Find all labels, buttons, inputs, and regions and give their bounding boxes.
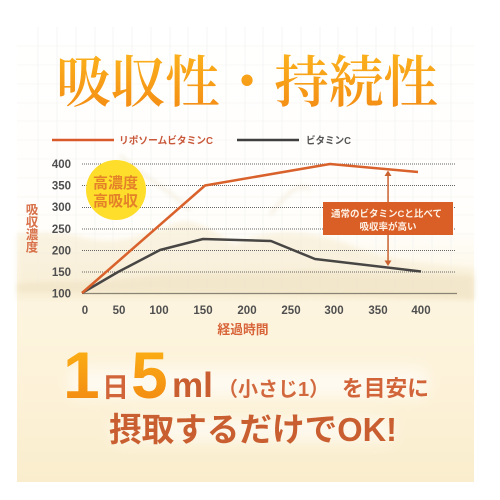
y axis title: 収	[26, 216, 39, 230]
legend	[52, 134, 351, 147]
x axis labels: 300	[324, 305, 344, 317]
line 1: を目安に	[342, 376, 429, 401]
x axis	[82, 292, 457, 294]
line 1: 5	[131, 338, 168, 412]
callout badge: high concentration: 高吸収	[93, 193, 138, 210]
arrow	[384, 170, 392, 266]
callout: higher absorption: 通常のビタミンCと比べて	[331, 208, 442, 220]
line 1: 日	[102, 373, 129, 403]
dosage message	[63, 338, 429, 448]
y axis title	[26, 203, 39, 254]
legend: liposome vitamin C: リポソームビタミンC	[119, 134, 213, 147]
y axis labels: 300	[52, 202, 71, 214]
callout badge: high concentration: 高濃度	[93, 174, 138, 192]
line chart	[26, 159, 457, 337]
x axis labels: 150	[193, 305, 213, 317]
grid lines	[82, 164, 456, 272]
line 2: 摂取するだけでOK!	[109, 411, 397, 448]
y axis labels: 200	[52, 246, 71, 258]
line 1: （小さじ1）	[218, 378, 329, 401]
series: liposome vitamin C	[82, 164, 418, 293]
x axis labels: 250	[281, 305, 301, 317]
callout badge: high concentration	[86, 160, 146, 220]
y axis labels: 250	[52, 224, 71, 236]
legend: vitamin C: ビタミンC	[306, 134, 351, 147]
x axis labels: 0	[82, 305, 88, 317]
x axis title: 経過時間	[217, 322, 269, 337]
series: vitamin C	[82, 239, 421, 293]
text glow	[70, 368, 428, 442]
y axis labels: 400	[52, 159, 71, 171]
x axis labels: 200	[237, 305, 257, 317]
x axis labels: 400	[411, 305, 431, 317]
title: 吸収性・持続性	[56, 53, 438, 115]
y axis labels: 350	[52, 180, 71, 192]
x axis labels: 350	[368, 305, 388, 317]
callout: higher absorption	[323, 202, 453, 235]
line 1: 1	[63, 338, 100, 412]
y axis title: 吸	[26, 203, 39, 217]
y axis labels	[52, 159, 71, 300]
y axis labels: 150	[52, 267, 71, 279]
legend: vitamin C	[237, 134, 351, 147]
callout: higher absorption: 吸収率が高い	[359, 221, 417, 233]
x axis labels: 100	[149, 305, 169, 317]
x axis labels	[82, 305, 431, 317]
y axis labels: 100	[52, 288, 71, 300]
line 1	[63, 338, 429, 412]
line 1: ml	[172, 366, 213, 405]
y axis title: 度	[26, 240, 39, 254]
y axis title: 濃	[26, 227, 39, 242]
x axis labels: 50	[113, 305, 125, 317]
